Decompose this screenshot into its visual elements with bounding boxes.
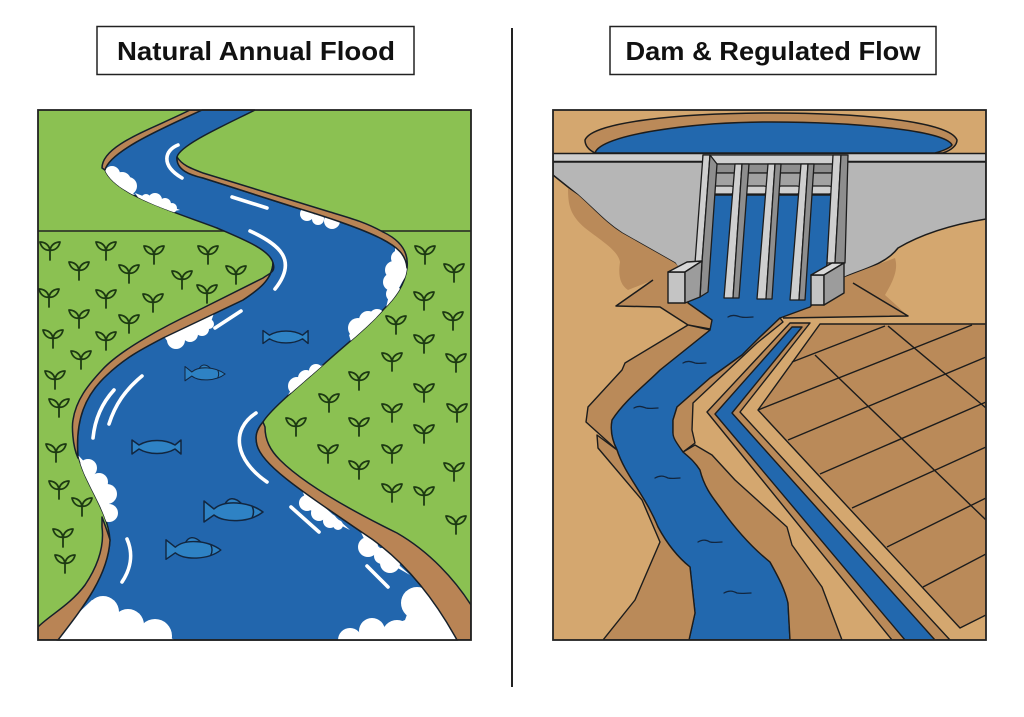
spillway piers xyxy=(695,155,848,300)
current lines xyxy=(93,145,388,587)
flood water overflow patches xyxy=(50,165,470,653)
left river bank xyxy=(586,318,842,640)
hill outlines xyxy=(616,280,908,329)
hillside shading xyxy=(568,188,908,330)
river channel xyxy=(58,110,457,640)
fish xyxy=(132,331,308,559)
river banks xyxy=(38,110,471,640)
dam wall xyxy=(554,152,986,278)
floodplain fields xyxy=(38,110,471,640)
water ripples xyxy=(634,315,753,593)
panel: dam and regulated flow xyxy=(553,110,986,640)
heading: Natural Annual Flood xyxy=(97,26,414,74)
crop seedlings xyxy=(39,242,467,573)
heading: Natural Annual Flood: Natural Annual Flood xyxy=(117,36,395,66)
right river bank xyxy=(673,318,783,452)
spillway water xyxy=(611,195,832,640)
heading: Dam & Regulated Flow: Dam & Regulated Flow xyxy=(626,36,921,66)
irrigation canal xyxy=(707,323,950,640)
reservoir xyxy=(585,113,957,153)
center divider xyxy=(511,28,513,687)
gate recess xyxy=(702,154,848,186)
abutment blocks xyxy=(668,261,844,305)
sand background xyxy=(553,110,986,640)
gate rollers xyxy=(711,186,833,194)
panel: natural annual flood xyxy=(38,110,471,653)
field grid xyxy=(758,324,986,628)
heading: Dam & Regulated Flow xyxy=(610,26,936,74)
